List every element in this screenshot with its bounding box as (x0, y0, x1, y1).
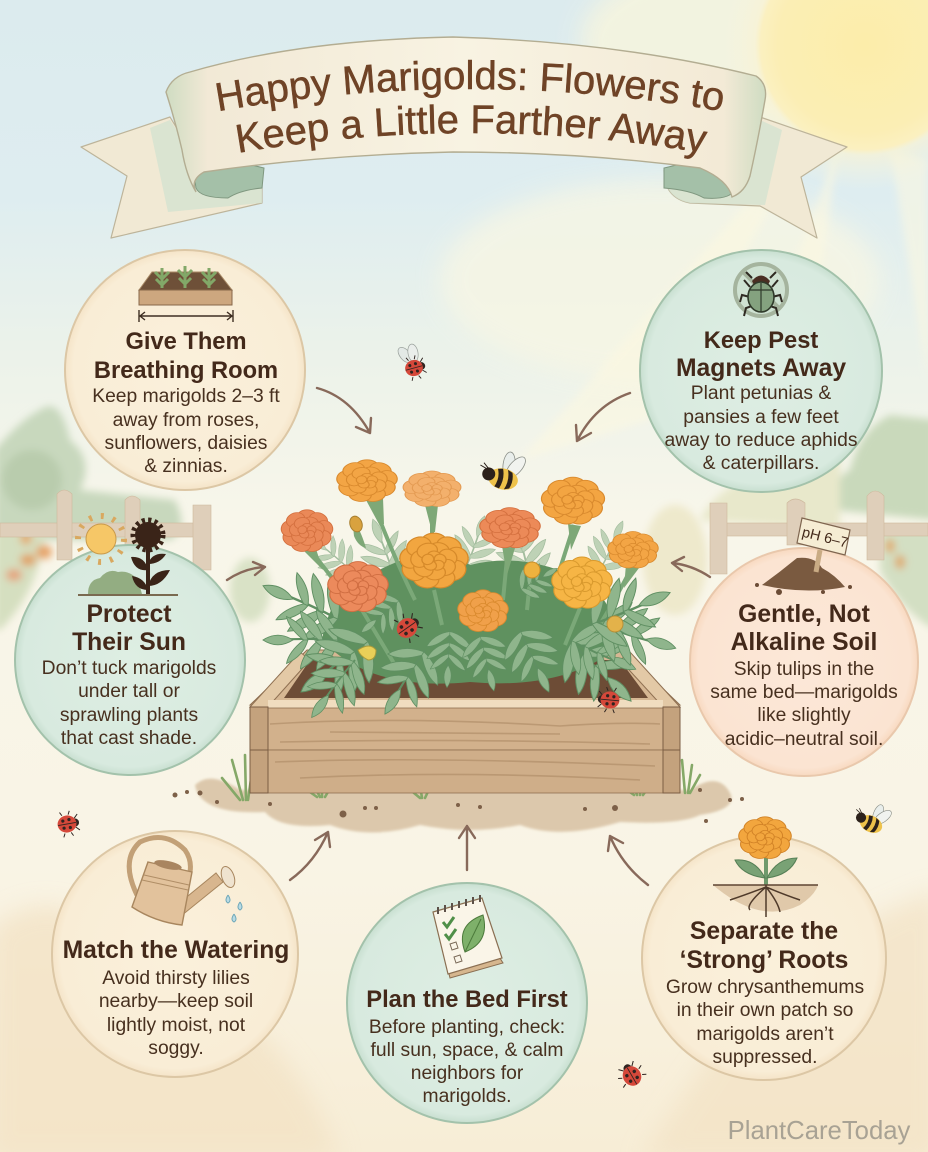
icon: soil mound with pH sign: pH 6–7 (800, 525, 850, 552)
planter back and soil (250, 650, 680, 705)
body text: like slightly (757, 705, 851, 726)
watermark: PlantCareToday (728, 1117, 911, 1145)
body text (42, 658, 216, 749)
banner tail left (81, 117, 262, 238)
heading: Separate the (690, 918, 838, 945)
body text: & zinnias. (144, 456, 228, 477)
body text: sunflowers, daisies (105, 433, 267, 454)
body text (710, 659, 898, 750)
body text: under tall or (78, 681, 180, 702)
body text (99, 968, 253, 1059)
heading: Plan the Bed First (366, 987, 568, 1013)
panel: separate the strong roots (642, 817, 886, 1080)
raised wooden planter with marigolds (250, 460, 685, 793)
ladybug on planter (597, 686, 621, 713)
icon: notepad with checklist and leaf (433, 895, 503, 978)
panel: protect their sun (15, 516, 245, 775)
title (216, 60, 723, 159)
body text (369, 1017, 565, 1107)
banner tail right (664, 117, 847, 238)
body text: full sun, space, & calm (371, 1040, 563, 1061)
body text: in their own patch so (677, 1000, 853, 1021)
body text: same bed—marigolds (710, 682, 898, 703)
panel: give them breathing room (65, 250, 305, 490)
body text: Avoid thirsty lilies (102, 968, 250, 989)
body text (666, 977, 864, 1068)
body text: that cast shade. (61, 728, 197, 749)
heading: Give Them (125, 329, 247, 355)
body text: away from roses, (113, 410, 259, 431)
heading: Gentle, Not (738, 601, 870, 628)
panel: match the watering (52, 831, 298, 1077)
body text: nearby—keep soil (99, 991, 253, 1012)
icon: soil mound with pH sign (755, 518, 852, 595)
title banner (80, 36, 848, 239)
body text: sprawling plants (60, 705, 198, 726)
heading (680, 918, 848, 974)
sun (720, 0, 928, 190)
body text: neighbors for (411, 1063, 524, 1084)
heading: Their Sun (72, 629, 186, 656)
body text: suppressed. (712, 1047, 818, 1068)
icon: sun and shaded flower (78, 516, 178, 595)
body text: away to reduce aphids (665, 430, 857, 451)
bee right (850, 796, 896, 839)
body text: Skip tulips in the (734, 659, 874, 680)
heading: Protect (86, 601, 172, 628)
heading (94, 329, 278, 384)
body text: pansies a few feet (683, 407, 839, 428)
arrows (227, 388, 710, 885)
body text (665, 383, 857, 474)
foliage (250, 498, 685, 734)
panel: plan the bed first (347, 883, 587, 1123)
heading (676, 328, 846, 382)
body text: acidic–neutral soil. (725, 729, 883, 750)
heading (72, 601, 186, 656)
icon: watering can (129, 838, 242, 925)
body text: Keep marigolds 2–3 ft (92, 386, 280, 407)
heading: Match the Watering (63, 937, 289, 964)
heading: Keep Pest (704, 328, 818, 354)
panel: gentle, not alkaline soil (690, 518, 918, 776)
body text: Plant petunias & (691, 383, 831, 404)
body text (92, 386, 280, 477)
ladybug bottom (614, 1058, 649, 1091)
heading: Breathing Room (94, 358, 278, 384)
icon: chrysanthemum with roots (713, 817, 818, 917)
heading (731, 601, 877, 656)
soil patch under planter (172, 755, 744, 832)
title: Happy Marigolds: Flowers to (216, 60, 723, 112)
title: Keep a Little Farther Away (236, 104, 708, 159)
ladybug left (56, 809, 81, 838)
marigold blooms (280, 460, 660, 660)
garden background: trees and fence (0, 406, 928, 630)
icon: beetle with no symbol (735, 264, 787, 316)
heading: Magnets Away (676, 355, 846, 382)
ladybug flying with wings (395, 343, 428, 382)
heading: ‘Strong’ Roots (680, 947, 848, 974)
banner main ribbon (166, 37, 766, 197)
planter front (250, 652, 680, 793)
body text: Before planting, check: (369, 1017, 565, 1038)
bee near flowers (476, 446, 530, 494)
body text: Don’t tuck marigolds (42, 658, 216, 679)
body text: marigolds. (423, 1086, 511, 1107)
ladybug on foliage (390, 609, 426, 645)
body text: & caterpillars. (703, 453, 819, 474)
icon: small planter with spacing arrow (139, 266, 233, 322)
body text: Grow chrysanthemums (666, 977, 864, 998)
body text: soggy. (148, 1038, 204, 1059)
panel: keep pest magnets away (640, 250, 882, 492)
heading: Alkaline Soil (731, 629, 877, 656)
body text: lightly moist, not (107, 1015, 246, 1036)
body text: marigolds aren’t (696, 1024, 834, 1045)
